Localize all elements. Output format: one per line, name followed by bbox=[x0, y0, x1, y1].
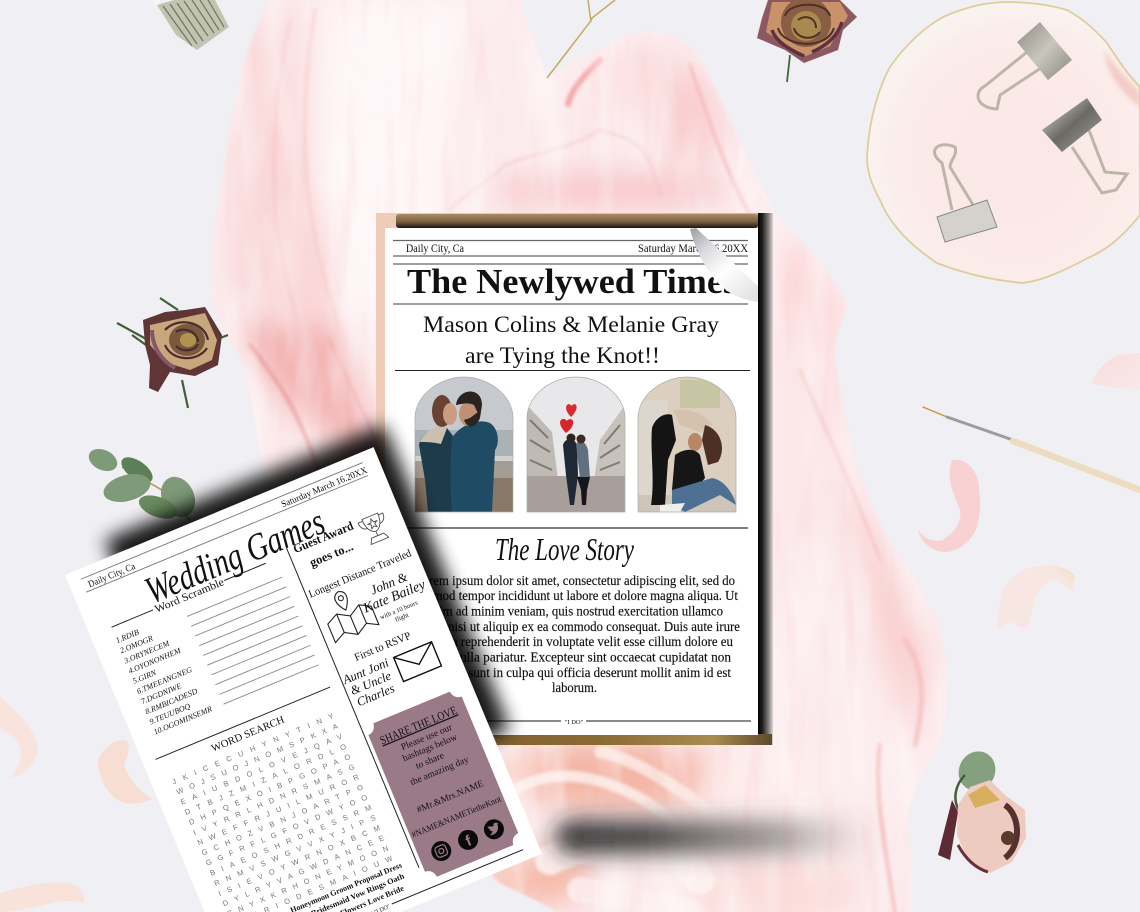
icon: facebook: f bbox=[463, 832, 475, 850]
flight note: with a 10 hours bbox=[379, 599, 419, 621]
winner names bbox=[355, 563, 428, 617]
thin paint brush right bbox=[923, 407, 1140, 490]
ticket instructions: hashtags below bbox=[401, 733, 459, 764]
binder clip right bbox=[1042, 98, 1127, 193]
footer I DO: "I DO" bbox=[565, 719, 584, 726]
rose bottom right bbox=[938, 745, 1026, 873]
rose top bbox=[757, 0, 857, 82]
plate pink stain bbox=[1105, 50, 1140, 108]
love story body copy: dolor in reprehenderit in voluptate velit esse cillum dolore eu bbox=[417, 634, 733, 649]
longest distance heading: Longest Distance Traveled bbox=[307, 547, 414, 601]
dried stem top bbox=[547, 0, 615, 78]
pink fabric bbox=[200, 0, 960, 912]
word search grid: ISIEVOYWRNOXBCM bbox=[217, 823, 381, 898]
binder clip lower left bbox=[934, 145, 997, 242]
petal left bbox=[0, 697, 38, 778]
eucalyptus leaves bbox=[85, 445, 201, 523]
answer lines bbox=[187, 577, 319, 704]
page curl bbox=[690, 228, 758, 302]
curled petal bbox=[918, 460, 980, 552]
paint brush top left bbox=[150, 0, 229, 50]
scramble list: 10.OGOMINSEMR bbox=[152, 704, 214, 737]
scramble list: 6.TMEEANGNEG bbox=[135, 665, 194, 696]
word search grid: BIAEOSHRDRESSRM bbox=[209, 803, 373, 878]
binder clip top bbox=[978, 22, 1072, 109]
petal lower left middle bbox=[98, 740, 152, 804]
winner names: Kate Bailey bbox=[360, 577, 428, 617]
love story body copy: laboris nisi ut aliquip ex ea commodo consequat. Duis aute irure bbox=[410, 619, 740, 634]
scramble list: 7.DGDNIWE bbox=[140, 681, 183, 706]
winner names: John & bbox=[368, 569, 410, 598]
love story body copy bbox=[410, 573, 740, 695]
flight note bbox=[379, 599, 422, 629]
headline line two: are Tying the Knot!! bbox=[465, 343, 660, 368]
wedding games sheet bbox=[65, 447, 542, 912]
ticket instructions bbox=[378, 716, 503, 840]
date: Saturday March 16.20XX bbox=[638, 243, 749, 255]
scramble list: 1.RDIB bbox=[114, 627, 140, 645]
share the love ticket bbox=[365, 688, 522, 880]
word search grid: IVYRRLHDNRSMASG bbox=[192, 762, 356, 837]
location: Daily City, Ca bbox=[87, 562, 138, 590]
love story body copy: fugiat nulla pariatur. Excepteur sint occaecat cupidatat non bbox=[419, 650, 731, 664]
header rules bbox=[393, 240, 748, 304]
RSVP winner names: & Uncle bbox=[348, 668, 394, 698]
scramble list: 3.ORYNECEM bbox=[122, 638, 172, 666]
location: Daily City, Ca bbox=[406, 243, 464, 255]
petal bottom left bbox=[0, 882, 84, 912]
goes to: goes to... bbox=[308, 539, 355, 570]
masthead title: The Newlywed Times bbox=[407, 262, 737, 301]
arched photo: couple in the street with hearts bbox=[527, 377, 625, 512]
scramble list: 4.OYONONHEM bbox=[127, 645, 183, 676]
ticket instructions: to share bbox=[414, 751, 446, 772]
word search grid: JKICECUHYNYTINY bbox=[171, 711, 335, 786]
scramble list: 8.RMBICADESD bbox=[144, 687, 199, 716]
word search heading: WORD SEARCH bbox=[210, 714, 287, 755]
icon: instagram bbox=[428, 838, 454, 864]
ticket heading: SHARE THE LOVE bbox=[378, 703, 459, 747]
wedding games title: Wedding Games bbox=[139, 501, 331, 612]
RSVP winner names bbox=[340, 655, 401, 711]
guest award heading: Guest Award bbox=[291, 519, 356, 556]
word search grid: GGFRFLGFOVDWYOO bbox=[204, 793, 369, 868]
newspaper sheet bbox=[385, 228, 758, 735]
flight note: flight bbox=[394, 612, 410, 624]
word search grid: DYLRYVAGWDANCEE bbox=[221, 833, 385, 908]
icon: folded map with pin bbox=[318, 582, 379, 644]
first to RSVP: First to RSVP bbox=[353, 630, 413, 664]
cast shadow on fabric bbox=[555, 820, 870, 854]
scramble list bbox=[113, 613, 214, 737]
ticket instructions: #NAME&NAMETietheKnot bbox=[410, 794, 503, 840]
icon: twitter bbox=[481, 816, 507, 842]
word search grid: DTBJZMIZALORDLO bbox=[183, 742, 348, 817]
rose left bbox=[117, 298, 228, 408]
word search grid: RNMVSWGVVXYJIPS bbox=[213, 813, 377, 888]
ticket instructions: the amazing day bbox=[409, 755, 471, 788]
RSVP winner names: Aunt Joni bbox=[340, 655, 391, 687]
word search grid: GCHOZVBNJOARTPO bbox=[200, 782, 365, 857]
love story body copy: Lorem ipsum dolor sit amet, consectetur adipiscing elit, sed do bbox=[415, 573, 735, 588]
arched photo: couple by the sea bbox=[415, 377, 513, 512]
newspaper gold frame bbox=[376, 213, 773, 745]
word search grid: NWEFFRJUILMUROR bbox=[196, 772, 361, 847]
word search grid: EAIUBDOLOVEJQAV bbox=[179, 732, 343, 807]
scramble list: 2.OMOGR bbox=[119, 634, 154, 655]
icon: trophy bbox=[357, 511, 392, 546]
word scramble heading: Word Scramble bbox=[153, 576, 226, 616]
love story body copy: enim ad minim veniam, quis nostrud exercitation ullamco bbox=[427, 604, 723, 618]
scramble list: 9.TEUUBOQ bbox=[148, 701, 192, 726]
games sheet shadow bbox=[105, 425, 510, 845]
RSVP winner names: Charles bbox=[355, 681, 397, 709]
love story heading: The Love Story bbox=[495, 531, 635, 567]
word search grid bbox=[171, 711, 395, 912]
love story body copy: laborum. bbox=[552, 680, 597, 695]
ticket instructions: Please use our bbox=[400, 723, 455, 753]
scramble list: 5.GIRN bbox=[131, 668, 158, 686]
date: Saturday March 16.20XX bbox=[280, 466, 369, 510]
word search grid: DHPQEXOIBPGOPAO bbox=[188, 752, 352, 827]
headline line one: Mason Colins & Melanie Gray bbox=[423, 312, 720, 337]
icon: envelope bbox=[394, 642, 441, 682]
pale petal bbox=[997, 566, 1075, 630]
word search grid: WOJSUOJNOMSPKXA bbox=[175, 722, 339, 796]
petal right edge bbox=[1092, 353, 1140, 390]
love story body copy: proident, sunt in culpa qui officia deserunt mollit anim id est bbox=[419, 665, 731, 680]
ticket instructions: #Mr.&Mrs.NAME bbox=[416, 779, 485, 816]
love story body copy: eiusmod tempor incididunt ut labore et dolore magna aliqua. Ut bbox=[412, 588, 738, 603]
arched photo: couple against a wall bbox=[638, 377, 736, 512]
ceramic plate bbox=[867, 2, 1140, 283]
icon: facebook bbox=[455, 827, 481, 853]
